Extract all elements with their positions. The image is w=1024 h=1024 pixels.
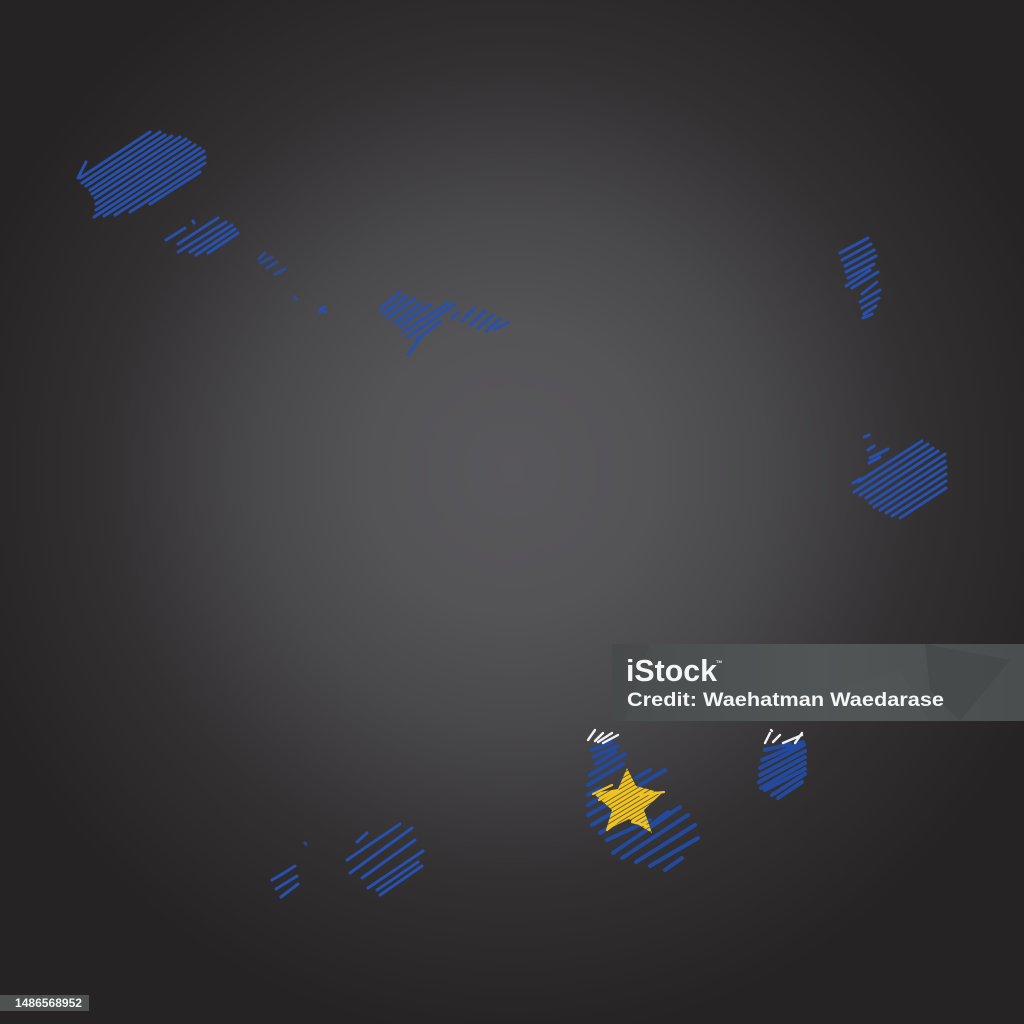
Santiago blue scribble <box>588 742 698 870</box>
island: Branco islet <box>294 297 296 299</box>
credit line: Credit: Waehatman Waedarase <box>627 690 944 711</box>
island: Sao Vicente <box>166 218 238 255</box>
island: Santa Luzia <box>259 253 285 274</box>
image id tag: 1486568952 <box>15 996 82 1010</box>
image id tag <box>0 995 89 1011</box>
island: Sal <box>840 238 880 318</box>
island: Brava <box>272 866 298 897</box>
island: Raso islet <box>320 307 325 312</box>
island: Sao Nicolau <box>380 292 508 355</box>
island: Santo Antao <box>78 132 205 217</box>
watermark banner <box>612 644 1024 721</box>
Santiago white scribble <box>588 730 618 743</box>
island: Boa Vista <box>853 435 946 518</box>
star scribble edges <box>593 785 664 830</box>
island: Maio <box>759 730 805 798</box>
Maio blue scribble <box>759 742 805 798</box>
island: Rombo islet <box>305 843 306 844</box>
Maio white scribble <box>765 730 802 743</box>
Santiago yellow star <box>593 768 664 833</box>
trademark mark: TM <box>716 659 722 664</box>
island: Santiago <box>588 730 698 870</box>
watermark logo: iStock <box>626 653 718 688</box>
island: Fogo <box>347 824 423 895</box>
